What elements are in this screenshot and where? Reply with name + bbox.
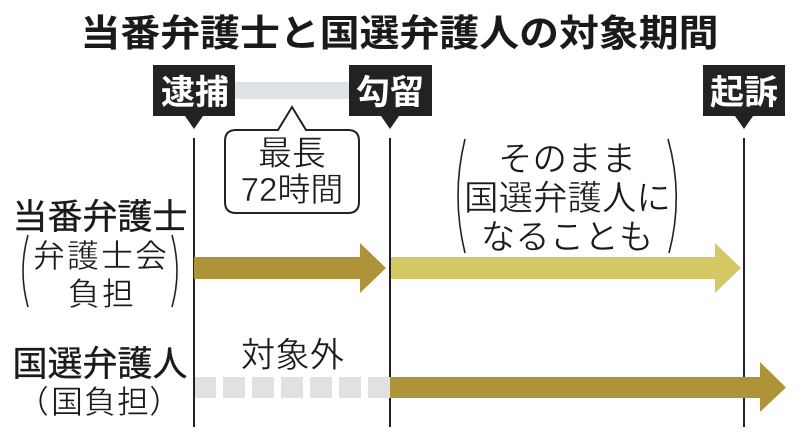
label: 対象外: 対象外 xyxy=(241,337,344,375)
row label: 当番弁護士: 弁護士会 xyxy=(33,238,169,274)
dashed bar: not covered xyxy=(195,377,390,398)
timeline vertical lines xyxy=(194,138,744,427)
arrow: 当番弁護士 dark xyxy=(194,243,386,293)
note: そのまま国選弁護人になることも: 国選弁護人に xyxy=(464,180,671,218)
arrow: 当番弁護士 light xyxy=(391,243,741,293)
row label: 当番弁護士: 当番弁護士 xyxy=(12,198,188,237)
label: 逮捕 xyxy=(153,65,235,129)
label: 逮捕: 逮捕 xyxy=(161,74,229,112)
row sublabel: 国負担: （国負担） xyxy=(17,384,181,420)
callout: 最長72時間 xyxy=(225,107,359,213)
label: 起訴: 起訴 xyxy=(710,74,778,112)
label: 勾留 xyxy=(349,65,432,129)
callout: 最長72時間: 最長 xyxy=(258,135,326,173)
label: 起訴 xyxy=(703,65,785,129)
title: 当番弁護士と国選弁護人の対象期間 xyxy=(80,13,719,54)
row label: 当番弁護士: 負担 xyxy=(68,276,136,312)
row label: 当番弁護士 xyxy=(12,198,188,312)
note: そのまま国選弁護人になることも: なることも xyxy=(481,219,653,257)
gray bar: arrest to detention xyxy=(235,82,349,99)
callout: 最長72時間: 72時間 xyxy=(241,171,343,208)
note: そのまま国選弁護人になることも xyxy=(458,139,676,257)
note: そのまま国選弁護人になることも: そのまま xyxy=(498,141,636,179)
arrow: 国選弁護人 xyxy=(390,362,786,412)
row label: 国選弁護人: 国選弁護人 xyxy=(12,345,188,384)
label: 勾留: 勾留 xyxy=(356,74,424,112)
